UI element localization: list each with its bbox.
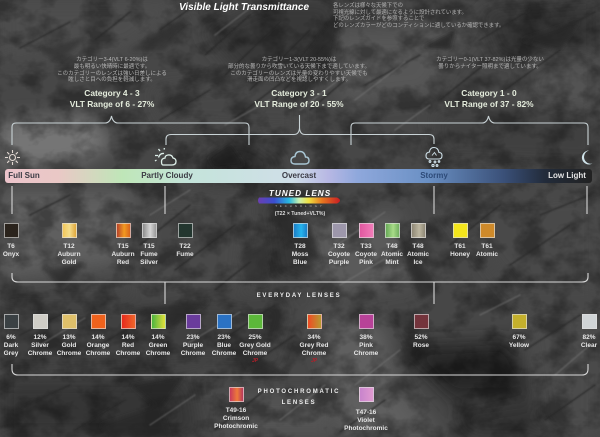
lens: 14% Red Chrome: Red — [122, 342, 134, 349]
lens: T47-16 Violet Photochromic — [342, 387, 390, 433]
lens: T15 Auburn Red: Auburn — [111, 251, 135, 258]
lens: 38% Pink Chrome: 38% — [359, 334, 372, 341]
category 4-3 description: このカテゴリーのレンズは強い日差しによる — [57, 71, 167, 77]
lens: 82% Clear: 82% — [582, 334, 596, 341]
lens: 52% Rose — [413, 314, 429, 349]
category 4-3 description: 眩しさと目への負担を軽減します。 — [68, 77, 156, 83]
lens: T15 Fume Silver: Silver — [140, 259, 158, 266]
logo formula: (T22 × Tuned+VLT%) — [275, 211, 325, 217]
lens: 82% Clear: Clear — [581, 342, 597, 349]
lens: 13% Gold Chrome: 13% — [62, 334, 76, 341]
intro text — [333, 2, 504, 29]
lens: T32 Coyote Purple: T32 — [333, 243, 345, 250]
lens: 14% Orange Chrome: Chrome — [86, 350, 110, 357]
category 1-0 description: カテゴリー0-1(VLT 37-82%)は光量の少ない — [436, 57, 544, 63]
lens: T28 Moss Blue: Blue — [293, 259, 307, 266]
lens: 23% Blue Chrome: Chrome — [212, 350, 236, 357]
lens: T48 Atomic Mint: Mint — [385, 259, 399, 266]
lens: 6% Dark Grey — [4, 314, 19, 357]
icon: cloud — [290, 150, 310, 165]
category 4-3 heading: VLT Range of 6 - 27% — [70, 99, 154, 109]
lens: T49-16 Crimson Photochromic — [212, 387, 260, 431]
lens: 67% Yellow: 67% — [512, 334, 526, 341]
lens: 14% Green Chrome — [146, 314, 170, 357]
lens: T6 Onyx: Onyx — [3, 251, 19, 258]
lens: T61 Atomic: T61 — [481, 243, 493, 250]
lens: 25% Grey Gold Chrome: Grey Gold — [239, 342, 271, 349]
lens: T33 Coyote Pink: Pink — [359, 259, 373, 266]
lens: T48 Atomic Ice: T48 — [412, 243, 424, 250]
lens: T12 Auburn Gold: T12 — [63, 243, 75, 250]
lens: 12% Silver Chrome — [28, 314, 52, 357]
lens: T33 Coyote Pink — [355, 223, 377, 266]
lens: 13% Gold Chrome: Gold — [62, 342, 76, 349]
lens: 38% Pink Chrome: Pink — [359, 342, 373, 349]
lens: 13% Gold Chrome: Chrome — [57, 350, 81, 357]
lens: T12 Auburn Gold: Auburn — [57, 251, 81, 258]
category 3-1 description: このカテゴリーのレンズは光量の変わりやすい天候でも — [230, 71, 368, 77]
lens: T32 Coyote Purple: Purple — [329, 259, 349, 266]
category 3-1 heading — [254, 88, 344, 109]
lens: T28 Moss Blue: T28 — [294, 243, 306, 250]
lens: T61 Honey: Honey — [450, 251, 470, 258]
category 3-1 description: 部分的な曇りから吹雪いている天候下まで適しています。 — [228, 64, 370, 70]
lens: 34% Grey Red Chrome: Grey Red — [300, 342, 328, 349]
category 3-1 heading: VLT Range of 20 - 55% — [254, 99, 344, 109]
lens: T33 Coyote Pink: T33 — [360, 243, 372, 250]
lens: 23% Purple Chrome — [181, 314, 205, 357]
intro text: 各レンズは様々な天候下での — [333, 3, 403, 9]
bar label: Full Sun: Full Sun — [8, 171, 40, 180]
lens: 6% Dark Grey: Grey — [4, 350, 18, 357]
lens: T49-16 Crimson Photochromic: Crimson — [223, 415, 249, 422]
lens: T22 Fume: T22 — [179, 243, 191, 250]
lens: 12% Silver Chrome: 12% — [33, 334, 46, 341]
mark: JP model: JP — [252, 358, 258, 364]
lens: T48 Atomic Ice — [407, 223, 429, 266]
lens: 82% Clear — [581, 314, 598, 349]
category 1-0 heading: Category 1 - 0 — [461, 88, 517, 98]
icon: partly cloudy — [154, 148, 177, 166]
category 1-0 description — [436, 56, 544, 70]
lens: 23% Blue Chrome: 23% — [217, 334, 230, 341]
lens: 34% Grey Red Chrome: 34% — [307, 334, 320, 341]
lens: T28 Moss Blue — [292, 223, 308, 266]
lens: 14% Red Chrome — [116, 314, 140, 357]
category 4-3 heading — [70, 88, 154, 109]
lens: T48 Atomic Mint: Atomic — [381, 251, 403, 258]
category 1-0 heading — [444, 88, 534, 109]
category 1-0 heading: VLT Range of 37 - 82% — [444, 99, 534, 109]
lens: 23% Purple Chrome: Purple — [183, 342, 203, 349]
lens: T15 Auburn Red: Red — [117, 259, 129, 266]
lens: 34% Grey Red Chrome: Chrome — [302, 350, 326, 357]
lens: 23% Purple Chrome: Chrome — [181, 350, 205, 357]
lens: 6% Dark Grey: Dark — [4, 342, 18, 349]
lens: 12% Silver Chrome: Silver — [31, 342, 49, 349]
lens: 25% Grey Gold Chrome: Chrome — [243, 350, 267, 357]
lens: T61 Honey — [450, 223, 470, 258]
lens: 34% Grey Red Chrome — [300, 314, 328, 357]
lens: 14% Red Chrome: Chrome — [116, 350, 140, 357]
category 4-3 description: カテゴリー3-4(VLT 6-20%)は — [76, 57, 148, 63]
lens: 14% Green Chrome: Green — [149, 342, 167, 349]
lens: 52% Rose: 52% — [414, 334, 428, 341]
lens: T32 Coyote Purple — [328, 223, 350, 266]
lens: T47-16 Violet Photochromic: Photochromic — [344, 425, 388, 432]
lens: 67% Yellow — [509, 314, 529, 349]
lens: 14% Orange Chrome — [86, 314, 110, 357]
lens: T12 Auburn Gold: Gold — [62, 259, 76, 266]
lens: 38% Pink Chrome — [354, 314, 378, 357]
category 1-0 description: 曇りからナイター照明まで適しています。 — [438, 64, 542, 70]
lens: T15 Fume Silver: T15 — [143, 243, 155, 250]
lens: 23% Purple Chrome: 23% — [186, 334, 200, 341]
lens: 6% Dark Grey: 6% — [6, 334, 16, 341]
lens: T48 Atomic Ice: Atomic — [407, 251, 429, 258]
lens: 14% Green Chrome: 14% — [151, 334, 164, 341]
mark: JP model: JP — [311, 358, 317, 364]
lens: T15 Auburn Red: T15 — [117, 243, 129, 250]
heading: everyday lenses: EVERYDAY LENSES — [257, 293, 341, 299]
lens: T48 Atomic Mint — [381, 223, 403, 266]
category 4-3 description — [57, 56, 167, 83]
lens: T49-16 Crimson Photochromic: T49-16 — [226, 407, 246, 414]
lens: T15 Fume Silver — [140, 223, 158, 266]
heading: photochromatic lenses: PHOTOCHROMATIC — [258, 389, 340, 395]
heading: photochromatic lenses: LENSES — [282, 400, 316, 406]
lens: 38% Pink Chrome: Chrome — [354, 350, 378, 357]
lens: T6 Onyx — [3, 223, 19, 258]
lens: 67% Yellow: Yellow — [509, 342, 529, 349]
lens: 25% Grey Gold Chrome — [239, 314, 271, 357]
lens: T22 Fume: Fume — [176, 251, 194, 258]
intro text: 可視光線に対して最適になるように設計されています。 — [333, 10, 467, 16]
lens: T22 Fume — [176, 223, 194, 258]
lens: 12% Silver Chrome: Chrome — [28, 350, 52, 357]
category 4-3 heading: Category 4 - 3 — [84, 88, 140, 98]
lens: 25% Grey Gold Chrome: 25% — [248, 334, 262, 341]
lens: 23% Blue Chrome: Blue — [217, 342, 231, 349]
category 3-1 description: 滑走面の凹凸などを視認しやすくします。 — [247, 77, 351, 83]
lens: T28 Moss Blue: Moss — [292, 251, 308, 258]
lens: 14% Green Chrome: Chrome — [146, 350, 170, 357]
lens: T15 Fume Silver: Fume — [140, 251, 158, 258]
tuned lens logo — [258, 189, 340, 217]
lens: T32 Coyote Purple: Coyote — [328, 251, 350, 258]
lens: T49-16 Crimson Photochromic: Photochromic — [214, 423, 258, 430]
intro text: 下記のレンズガイドを参照することで — [333, 16, 424, 22]
bar label: Overcast: Overcast — [282, 171, 316, 180]
lens: 13% Gold Chrome — [57, 314, 81, 357]
lens: T47-16 Violet Photochromic: Violet — [357, 417, 375, 424]
bar label: Partly Cloudy: Partly Cloudy — [141, 171, 193, 180]
bar label: Stormy: Stormy — [420, 171, 448, 180]
lens: 52% Rose: Rose — [413, 342, 429, 349]
lens: T61 Atomic: Atomic — [476, 251, 498, 258]
category 4-3 description: 最も明るい快晴時に最適です。 — [74, 64, 150, 70]
lens: T61 Atomic — [476, 223, 498, 258]
lens: T6 Onyx: T6 — [7, 243, 15, 250]
lens: T61 Honey: T61 — [454, 243, 466, 250]
lens: 14% Red Chrome: 14% — [121, 334, 134, 341]
icon: storm cloud with snow — [426, 147, 442, 168]
lens: T12 Auburn Gold — [57, 223, 81, 266]
condition gradient bar — [5, 169, 592, 183]
heading: photochromatic lenses — [258, 387, 340, 409]
logo wordmark: TUNED LENS — [269, 189, 331, 198]
intro text: どのレンズカラーがどのコンディションに適しているか確認できます。 — [333, 23, 504, 29]
lens: T15 Auburn Red — [111, 223, 135, 266]
logo subtitle: TECHNOLOGY — [275, 204, 325, 208]
lens: T48 Atomic Mint: T48 — [386, 243, 398, 250]
bar label: Low Light: Low Light — [548, 171, 586, 180]
category 3-1 heading: Category 3 - 1 — [271, 88, 327, 98]
lens: 23% Blue Chrome — [212, 314, 236, 357]
lens: T48 Atomic Ice: Ice — [413, 259, 423, 266]
icon: sun — [5, 150, 20, 165]
lens: T33 Coyote Pink: Coyote — [355, 251, 377, 258]
category 3-1 description — [228, 56, 370, 83]
title: Visible Light Transmittance — [179, 2, 309, 13]
lens: T47-16 Violet Photochromic: T47-16 — [356, 409, 376, 416]
logo spectrum — [258, 198, 340, 204]
icon: crescent moon — [582, 150, 592, 164]
lens: 14% Orange Chrome: Orange — [87, 342, 109, 349]
lens: 14% Orange Chrome: 14% — [91, 334, 104, 341]
category 3-1 description: カテゴリー1-3(VLT 20-55%)は — [262, 57, 336, 63]
